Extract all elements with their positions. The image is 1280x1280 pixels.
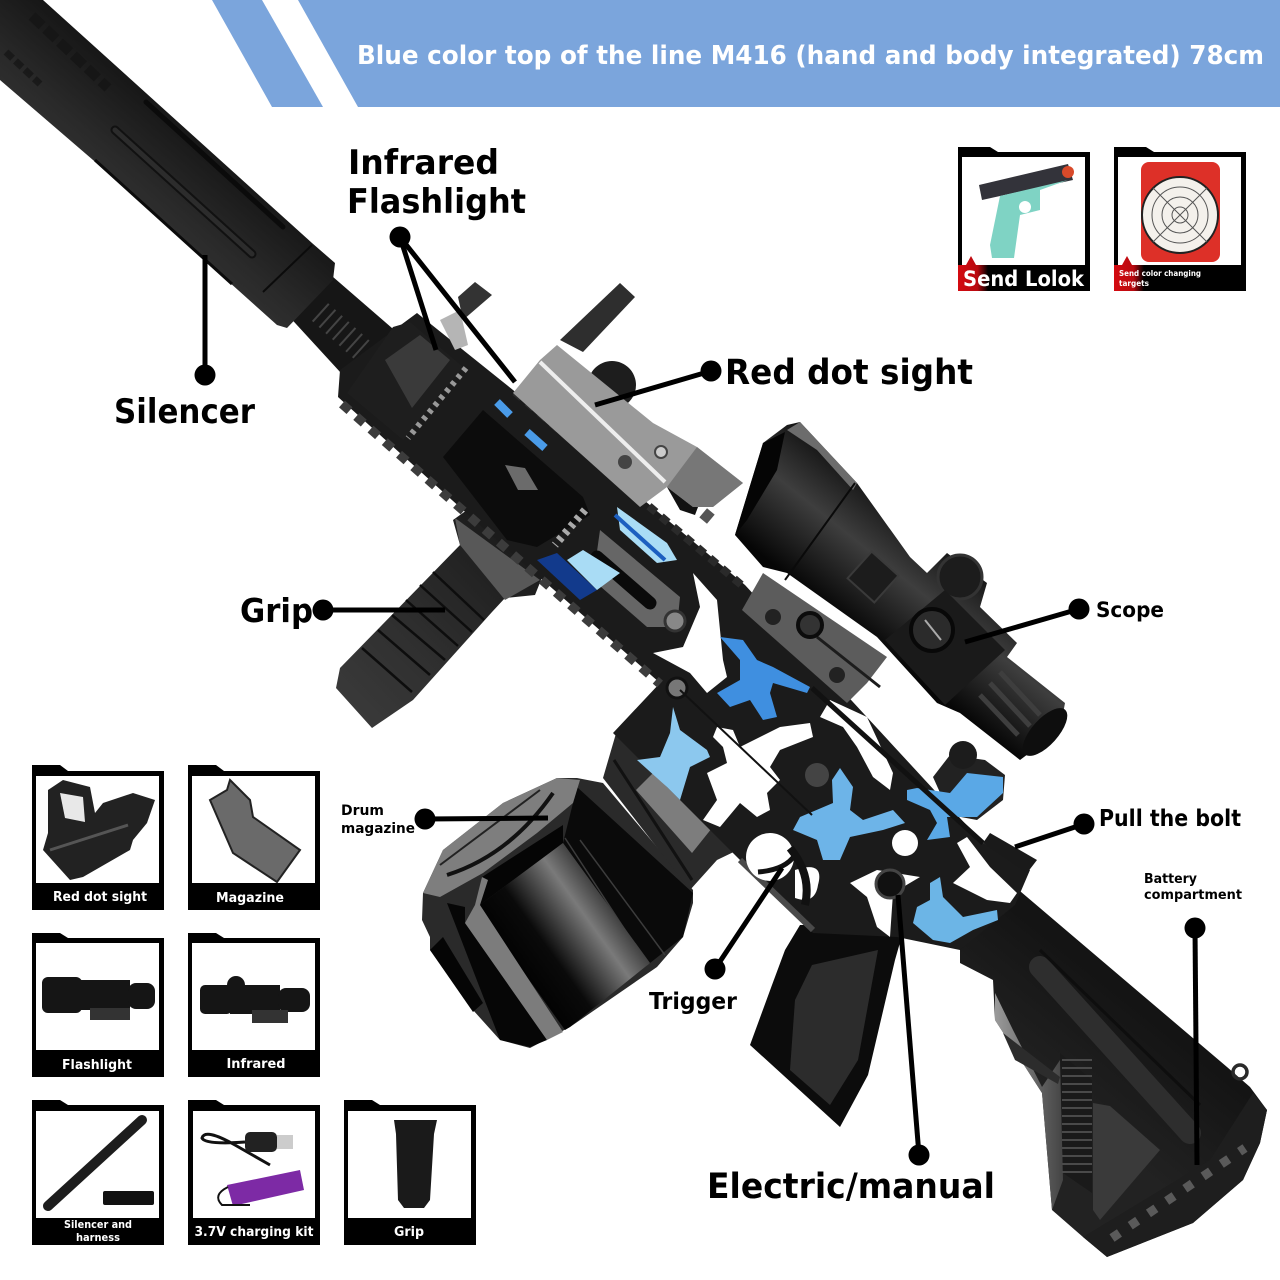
header banner: [212, 0, 1280, 107]
bolt handle: [983, 833, 1037, 873]
label: drum magazine: [341, 803, 415, 837]
card: red dot sight: [32, 765, 164, 910]
icon: harness: [103, 1191, 154, 1205]
callout dots: [194, 226, 1206, 1166]
card: color changing targets: targets: [1119, 279, 1149, 288]
label: red dot sight: Red dot sight: [725, 353, 973, 393]
drum magazine: [422, 778, 693, 1048]
card: charging kit: [188, 1100, 320, 1245]
icon: silencer tube: [48, 1120, 142, 1206]
stock: [960, 880, 1267, 1257]
icon: flashlight: [42, 977, 155, 1020]
icon: battery: [218, 1170, 304, 1206]
icon: infrared: [200, 976, 310, 1023]
trigger guard: [746, 833, 819, 905]
icon: target: [1141, 162, 1220, 262]
card: infrared: Infrared: [226, 1057, 286, 1072]
label: infrared flashlight: Flashlight: [347, 182, 526, 222]
icon: red dot sight: [43, 780, 155, 880]
label: drum magazine: magazine: [341, 821, 415, 837]
card: grip: Grip: [394, 1225, 424, 1240]
label: grip: Grip: [240, 591, 313, 630]
magazine well: [603, 690, 800, 890]
card: grip: [344, 1100, 476, 1245]
card: color changing targets: Send color changing: [1119, 269, 1201, 278]
card: silencer and harness: [32, 1100, 164, 1245]
card: magazine: [188, 765, 320, 910]
camo: handguard blue: [497, 402, 677, 600]
card: flashlight: [32, 933, 164, 1077]
camo: blue patches: [637, 637, 1003, 943]
label: infrared flashlight: Infrared: [348, 143, 499, 183]
label: battery compartment: [1144, 872, 1242, 903]
card: silencer and harness: Silencer and: [64, 1219, 132, 1231]
card: send Lolok: [958, 147, 1090, 291]
card: flashlight: Flashlight: [62, 1058, 132, 1073]
receiver and handguard: [338, 313, 1037, 950]
icon: magazine: [210, 780, 300, 882]
label: trigger: Trigger: [649, 989, 738, 1015]
bolt knob: [949, 741, 977, 769]
card: infrared: [188, 933, 320, 1077]
label: scope: Scope: [1096, 598, 1164, 622]
icon: USB cable: [202, 1134, 270, 1165]
foregrip: [336, 510, 545, 728]
label: drum magazine: Drum: [341, 803, 384, 819]
label: silencer: Silencer: [114, 392, 255, 432]
red dot sight: [513, 283, 743, 524]
silencer: [0, 0, 335, 328]
flashlight: [347, 282, 590, 547]
callout lines: [205, 237, 1197, 1165]
label: battery compartment: Battery: [1144, 872, 1198, 887]
pistol grip: [750, 925, 905, 1127]
card: red dot sight: Red dot sight: [53, 890, 147, 905]
camo: white patches: [653, 573, 1017, 937]
card: silencer and harness: harness: [76, 1232, 120, 1244]
label: infrared flashlight: [347, 143, 526, 222]
card: charging kit: 3.7V charging kit: [194, 1225, 314, 1240]
label: electric/manual: Electric/manual: [707, 1167, 995, 1207]
icon: grip: [394, 1120, 437, 1208]
card: color changing targets: [1114, 147, 1246, 291]
scope: [735, 422, 1075, 763]
icon: toy pistol: [979, 164, 1074, 258]
icon: USB plug: [245, 1132, 293, 1152]
label: pull the bolt: Pull the bolt: [1099, 806, 1241, 832]
label: battery compartment: compartment: [1144, 888, 1242, 903]
scope rail mount: [742, 573, 887, 703]
card: send Lolok: Send Lolok: [963, 267, 1085, 291]
card: magazine: Magazine: [216, 891, 284, 906]
barrel: [285, 270, 400, 385]
